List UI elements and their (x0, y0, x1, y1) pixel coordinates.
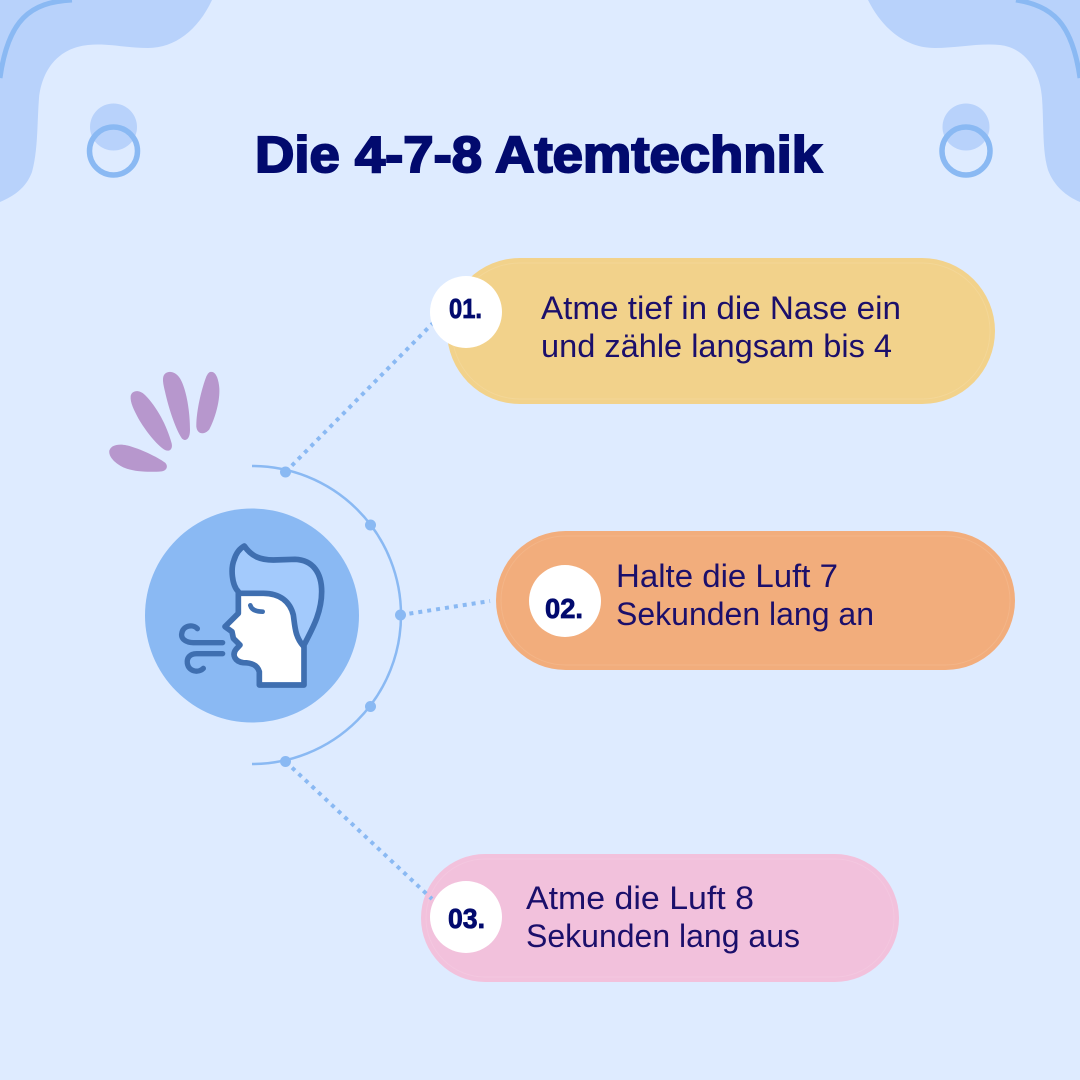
step 2 number: 02. (545, 593, 583, 624)
step 3 number (430, 881, 502, 953)
dotted connector to step 1 (286, 318, 438, 472)
title: Die 4-7-8 Atemtechnik (255, 126, 823, 183)
step 1 number (430, 276, 502, 348)
step 3 number: 03. (448, 903, 485, 934)
decoration: right circles (942, 104, 990, 175)
decoration: top-right blob (868, 0, 1080, 202)
dotted connector to step 3 (286, 762, 432, 899)
decoration: top-left blob (0, 0, 212, 202)
panel: step 2 (496, 531, 1015, 670)
step 1 text: und zähle langsam bis 4 (541, 328, 892, 364)
step 2 text: Halte die Luft 7 (616, 558, 838, 594)
panel: step 1 (430, 258, 995, 404)
step 3 text: Sekunden lang aus (526, 918, 800, 954)
decoration: purple leaves (109, 372, 219, 472)
step 2 text: Sekunden lang an (616, 596, 874, 632)
step 2 number (529, 565, 601, 637)
step 1 text: Atme tief in die Nase ein (541, 290, 901, 326)
panel: step 3 (421, 854, 899, 982)
step 1 number: 01. (449, 293, 482, 324)
connector arc with dots (252, 466, 406, 767)
step 3 text: Atme die Luft 8 (526, 880, 754, 916)
decoration: left circles (90, 104, 138, 175)
icon: person exhaling (145, 508, 359, 722)
dotted connector to step 2 (400, 601, 490, 615)
